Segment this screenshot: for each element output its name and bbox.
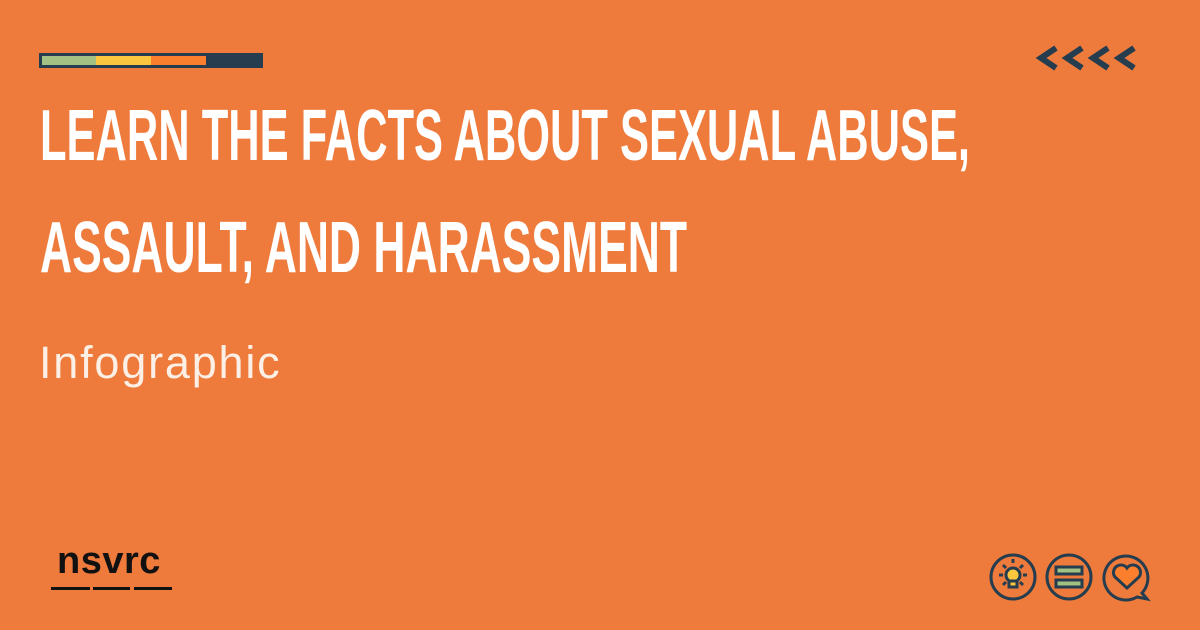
icons xyxy=(990,554,1151,602)
title xyxy=(40,96,970,288)
logo: nsvrc xyxy=(57,540,161,582)
icon: lightbulb xyxy=(991,555,1035,599)
subtitle: Infographic xyxy=(39,337,281,388)
color bar xyxy=(39,53,263,68)
icon: heart bubble xyxy=(1104,556,1148,600)
chevrons xyxy=(1036,46,1136,70)
icon: equals xyxy=(1047,555,1091,599)
